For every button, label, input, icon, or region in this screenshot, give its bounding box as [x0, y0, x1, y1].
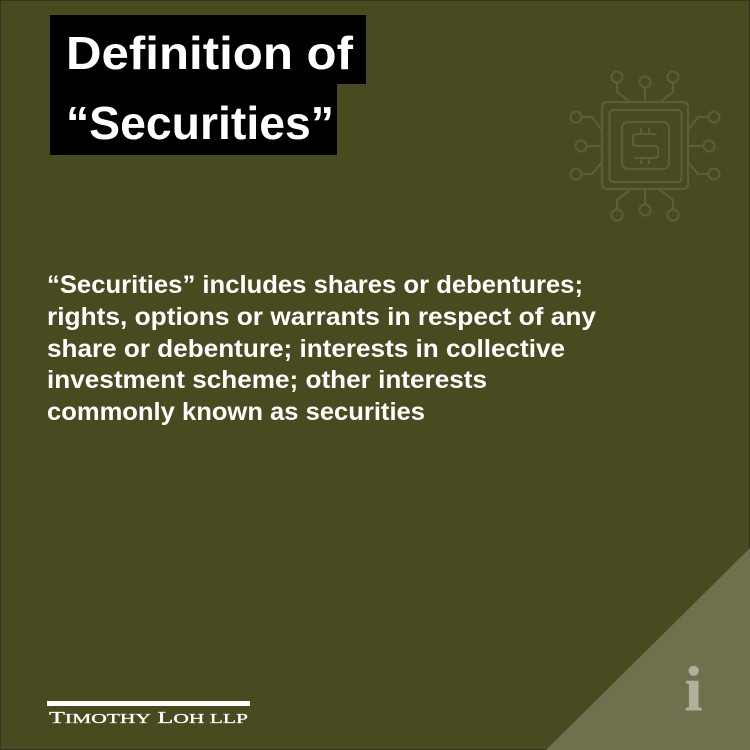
body text: [47, 271, 596, 426]
logo: Timothy Loh LLP: T IMOTHY L OH LLP: [49, 708, 248, 727]
body text: share or debenture; interests in collective: [47, 335, 565, 363]
body text: investment scheme; other interests: [47, 366, 487, 394]
body text: “Securities” includes shares or debentures;: [47, 271, 583, 299]
title block: [50, 15, 366, 155]
icon: letter i: i: [685, 653, 702, 724]
title block: “Securities”: [66, 97, 334, 149]
logo: Timothy Loh LLP: [47, 701, 250, 727]
title block: Definition of: [66, 27, 354, 79]
body text: rights, options or warrants in respect of any: [47, 303, 596, 331]
body text: commonly known as securities: [47, 398, 425, 426]
icon: chip with dollar sign: [570, 72, 720, 220]
info corner triangle: [546, 548, 750, 750]
